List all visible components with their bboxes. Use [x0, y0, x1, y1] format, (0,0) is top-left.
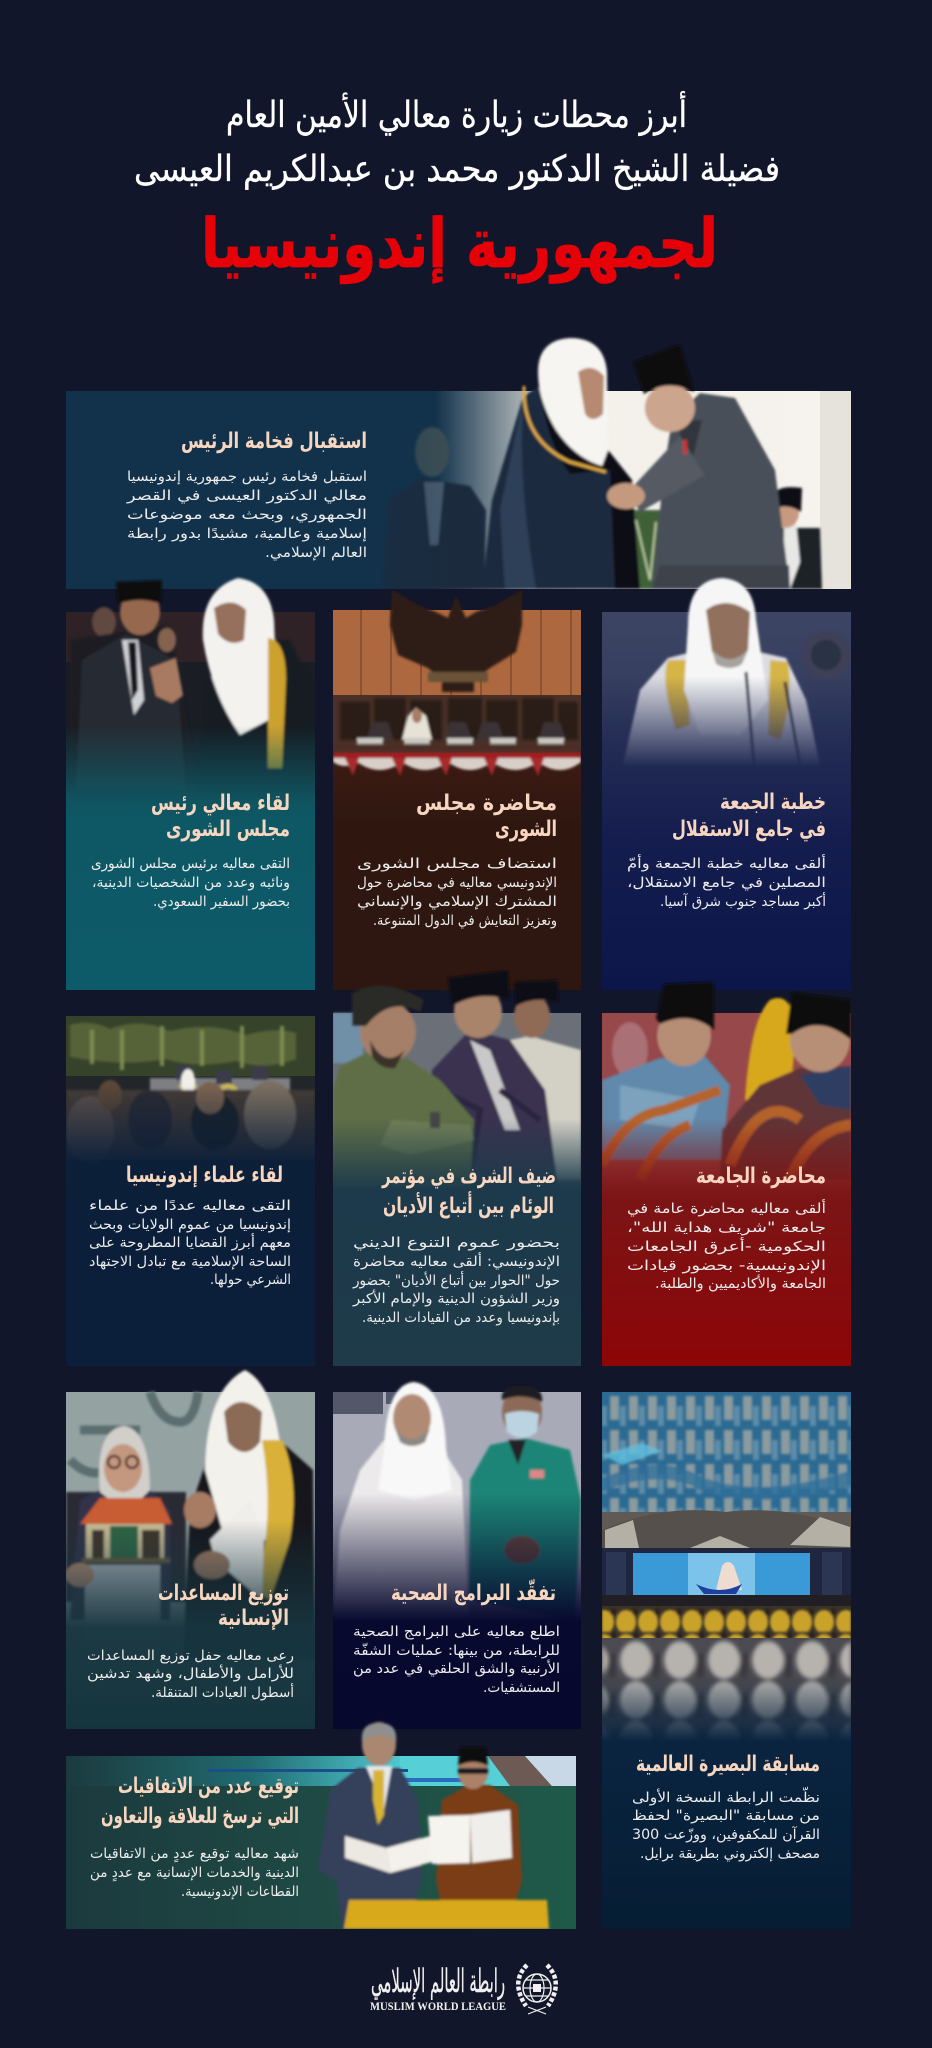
heading: لقاء معالي رئيس	[151, 791, 290, 816]
title	[134, 91, 780, 284]
body text	[627, 854, 826, 910]
body text	[357, 856, 557, 929]
heading: الوئام بين أتباع الأديان	[383, 1190, 554, 1219]
title line 1: أبرز محطات زيارة معالي الأمين العام	[226, 91, 687, 136]
body text: الشرعي حولها.	[210, 1272, 291, 1288]
heading	[416, 791, 557, 842]
body text: التقى معاليه عددًا من علماء	[89, 1198, 291, 1214]
body text: استضاف مجلس الشورى	[357, 856, 557, 872]
body text: العالم الإسلامي.	[265, 545, 367, 561]
heading: الإنسانية	[218, 1606, 289, 1631]
body text: استقبل فخامة رئيس جمهورية إندونيسيا	[127, 469, 367, 485]
body text: وزير الشؤون الدينية والإمام الأكبر	[352, 1289, 560, 1307]
body text: اطلع معاليه على البرامج الصحية	[353, 1624, 560, 1640]
body text: الجامعة والأكاديميين والطلبة.	[655, 1274, 826, 1292]
body text: بحضور السفير السعودي.	[153, 894, 290, 910]
panel: health programmes inspection	[333, 1382, 581, 1729]
panel: Indonesian scholars meeting	[66, 1016, 315, 1366]
icon: globe in wreath emblem	[518, 1965, 556, 2014]
heading: مسابقة البصيرة العالمية	[636, 1752, 820, 1777]
body text	[87, 1648, 294, 1701]
body text	[91, 856, 290, 910]
heading: التي ترسخ للعلاقة والتعاون	[101, 1804, 299, 1829]
body text: المصلين في جامع الاستقلال،	[627, 875, 826, 891]
body text: القطاعات الإندونيسية.	[181, 1884, 299, 1900]
body text	[90, 1846, 299, 1900]
body text	[632, 1787, 820, 1862]
heading: ضيف الشرف في مؤتمر	[381, 1164, 556, 1189]
body text: الحكومية -أعرق الجامعات	[627, 1237, 826, 1255]
body text	[89, 1198, 291, 1288]
heading	[151, 791, 290, 842]
heading: لقاء علماء إندونيسيا	[126, 1163, 283, 1188]
body text: شهد معاليه توقيع عددٍ من الاتفاقيات	[90, 1846, 299, 1863]
body text	[627, 1199, 826, 1292]
body text: الإندونيسي: ألقى معاليه محاضرة	[353, 1252, 560, 1270]
panel: Al-Baseerah global competition	[602, 1392, 851, 1929]
title line 3: country: لجمهورية إندونيسيا	[201, 205, 718, 284]
body text: للرابطة، من بينها: عمليات الشفّة	[353, 1643, 560, 1659]
body text	[353, 1624, 560, 1696]
body text: الدينية والخدمات الإنسانية مع عددٍ من	[90, 1865, 299, 1882]
panel: friday sermon	[602, 578, 851, 990]
heading: خطبة الجمعة	[720, 790, 826, 815]
body text: الجمهوري، وبحث معه موضوعات	[127, 507, 367, 523]
heading	[672, 790, 826, 842]
photo: aid ceremony	[66, 1370, 315, 1729]
body text: القرآن للمكفوفين، ووزّعت 300	[632, 1826, 820, 1843]
heading	[158, 1581, 289, 1631]
photo: university audience	[602, 982, 851, 1366]
panel: agreements signing	[66, 1722, 576, 1929]
body text: ونائبه وعدد من الشخصيات الدينية،	[92, 875, 290, 891]
body text: حول "الحوار بين أتباع الأديان" بحضور	[352, 1271, 560, 1289]
heading: محاضرة مجلس	[416, 791, 557, 816]
body text: بإندونيسيا وعدد من القيادات الدينية.	[362, 1310, 560, 1326]
heading	[101, 1774, 299, 1829]
heading: الشورى	[495, 817, 557, 842]
panel: shura council lecture	[333, 590, 581, 990]
body text	[352, 1235, 560, 1326]
logo: Muslim World League: رابطة العالم الإسلامي	[371, 1962, 505, 2000]
body text: ألقى معاليه محاضرة عامة في	[627, 1199, 826, 1217]
panel: shura council president meeting	[66, 578, 315, 990]
heading	[381, 1164, 556, 1219]
panel: president reception	[66, 338, 851, 589]
panel: humanitarian aid distribution	[66, 1370, 315, 1729]
photo: sheikh with doctor	[333, 1382, 581, 1729]
heading: في جامع الاستقلال	[672, 817, 826, 842]
photo: meeting with shura president	[66, 578, 315, 990]
body text: المشترك الإسلامي والإنساني	[357, 894, 557, 910]
heading: توزيع المساعدات	[158, 1581, 289, 1606]
body text: رعى معاليه حفل توزيع المساعدات	[87, 1648, 294, 1664]
title line 2: فضيلة الشيخ الدكتور محمد بن عبدالكريم العيسى	[134, 149, 780, 190]
panel: guest of honour at interfaith conference	[333, 970, 581, 1366]
body text: معالي الدكتور العيسى في القصر	[126, 488, 367, 504]
body text: أكبر مساجد جنوب شرق آسيا.	[660, 892, 826, 910]
body text: الساحة الإسلامية مع تبادل الاجتهاد	[89, 1254, 291, 1270]
body text: أسطول العيادات المتنقلة.	[151, 1683, 294, 1701]
heading: استقبال فخامة الرئيس	[181, 429, 367, 454]
photo: parliament hall	[333, 590, 581, 990]
body text: إسلامية وعالمية، مشيدًا بدور رابطة	[127, 526, 367, 542]
body text: من مسابقة "البصيرة" لحفظ	[632, 1808, 820, 1824]
body text: بحضور عموم التنوع الديني	[353, 1235, 560, 1251]
heading: تفقّد البرامج الصحية	[391, 1579, 556, 1606]
body text: التقى معاليه برئيس مجلس الشورى	[91, 856, 290, 872]
heading: محاضرة الجامعة	[696, 1164, 826, 1189]
body text	[126, 469, 367, 561]
photo: competition hall	[602, 1392, 851, 1929]
body text: ألقى معاليه خطبة الجمعة وأمّ	[627, 854, 826, 872]
heading: توقيع عدد من الاتفاقيات	[118, 1774, 299, 1799]
body text: الأرنبية والشق الحلقي في عدد من	[353, 1659, 560, 1677]
photo: conference guests	[333, 970, 581, 1366]
logo english wordmark: MUSLIM WORLD LEAGUE	[370, 2001, 506, 2013]
body text: معهم أبرز القضايا المطروحة على	[89, 1233, 291, 1251]
body text: نظّمت الرابطة النسخة الأولى	[632, 1787, 820, 1806]
body text: المستشفيات.	[483, 1680, 560, 1696]
body text: مصحف إلكتروني بطريقة برايل.	[640, 1846, 820, 1862]
body text: الإندونيسي معاليه في محاضرة حول	[357, 875, 557, 891]
logo: Muslim World League	[370, 1962, 556, 2014]
photo: signing ceremony	[66, 1722, 576, 1929]
body text: وتعزيز التعايش في الدول المتنوعة.	[373, 913, 557, 929]
heading: مجلس الشورى	[166, 817, 290, 842]
panel: university lecture	[602, 982, 851, 1366]
body text: جامعة "شريف هداية الله"،	[627, 1220, 826, 1236]
photo: sermon at Istiqlal mosque	[602, 578, 851, 990]
photo: president and sheikh	[66, 338, 851, 589]
body text: إندونيسيا من عموم الولايات وبحث	[89, 1217, 291, 1233]
body text: الإندونيسية- بحضور قيادات	[627, 1258, 826, 1274]
body text: للأرامل والأطفال، وشهد تدشين	[87, 1664, 294, 1682]
photo: scholars gathering	[66, 1016, 315, 1366]
